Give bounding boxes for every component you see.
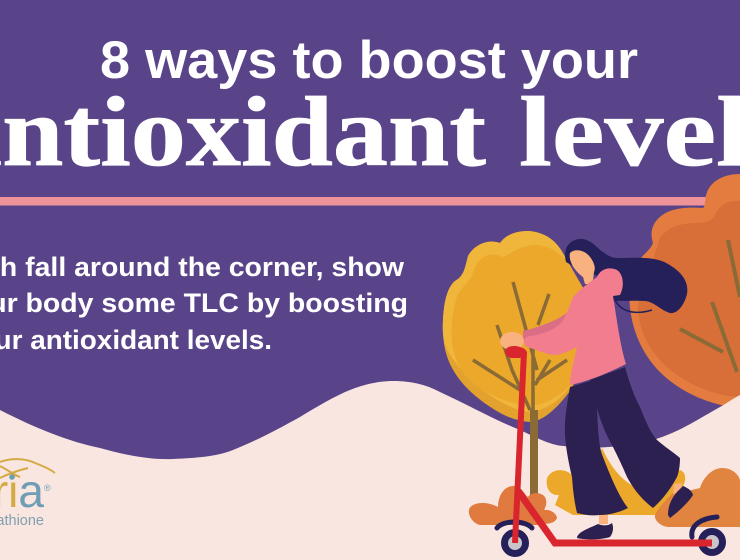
hand — [500, 332, 524, 350]
logo — [0, 459, 55, 529]
pink divider rule — [0, 197, 712, 206]
front wheel — [497, 522, 532, 528]
loose hair strand — [615, 300, 652, 312]
cream ground wave — [0, 381, 740, 560]
back arm — [523, 312, 568, 342]
girl on scooter — [500, 239, 693, 539]
orange tree — [629, 174, 740, 408]
back shoe — [668, 486, 693, 518]
front ankle — [599, 515, 608, 524]
yellow tree — [443, 231, 590, 495]
scooter — [497, 346, 722, 554]
face — [570, 250, 596, 284]
right trouser leg — [590, 367, 680, 508]
back ankle — [673, 483, 682, 494]
title line one: 8 ways to boost your — [100, 31, 638, 90]
hair — [565, 239, 687, 313]
front shoe — [577, 523, 613, 539]
yellow bush — [547, 448, 690, 515]
sweater — [524, 268, 626, 385]
left orange bush — [469, 486, 557, 525]
intro text — [0, 252, 408, 355]
logo i dot — [9, 474, 15, 480]
scooter handle — [505, 346, 527, 358]
scooter deck — [518, 491, 712, 543]
back wheel — [692, 517, 717, 537]
left trouser leg — [565, 378, 628, 515]
right orange bush — [655, 468, 740, 527]
title line two — [0, 76, 740, 187]
scooter post — [515, 352, 524, 543]
registered mark: ® — [44, 483, 51, 493]
logo arches — [0, 459, 55, 478]
